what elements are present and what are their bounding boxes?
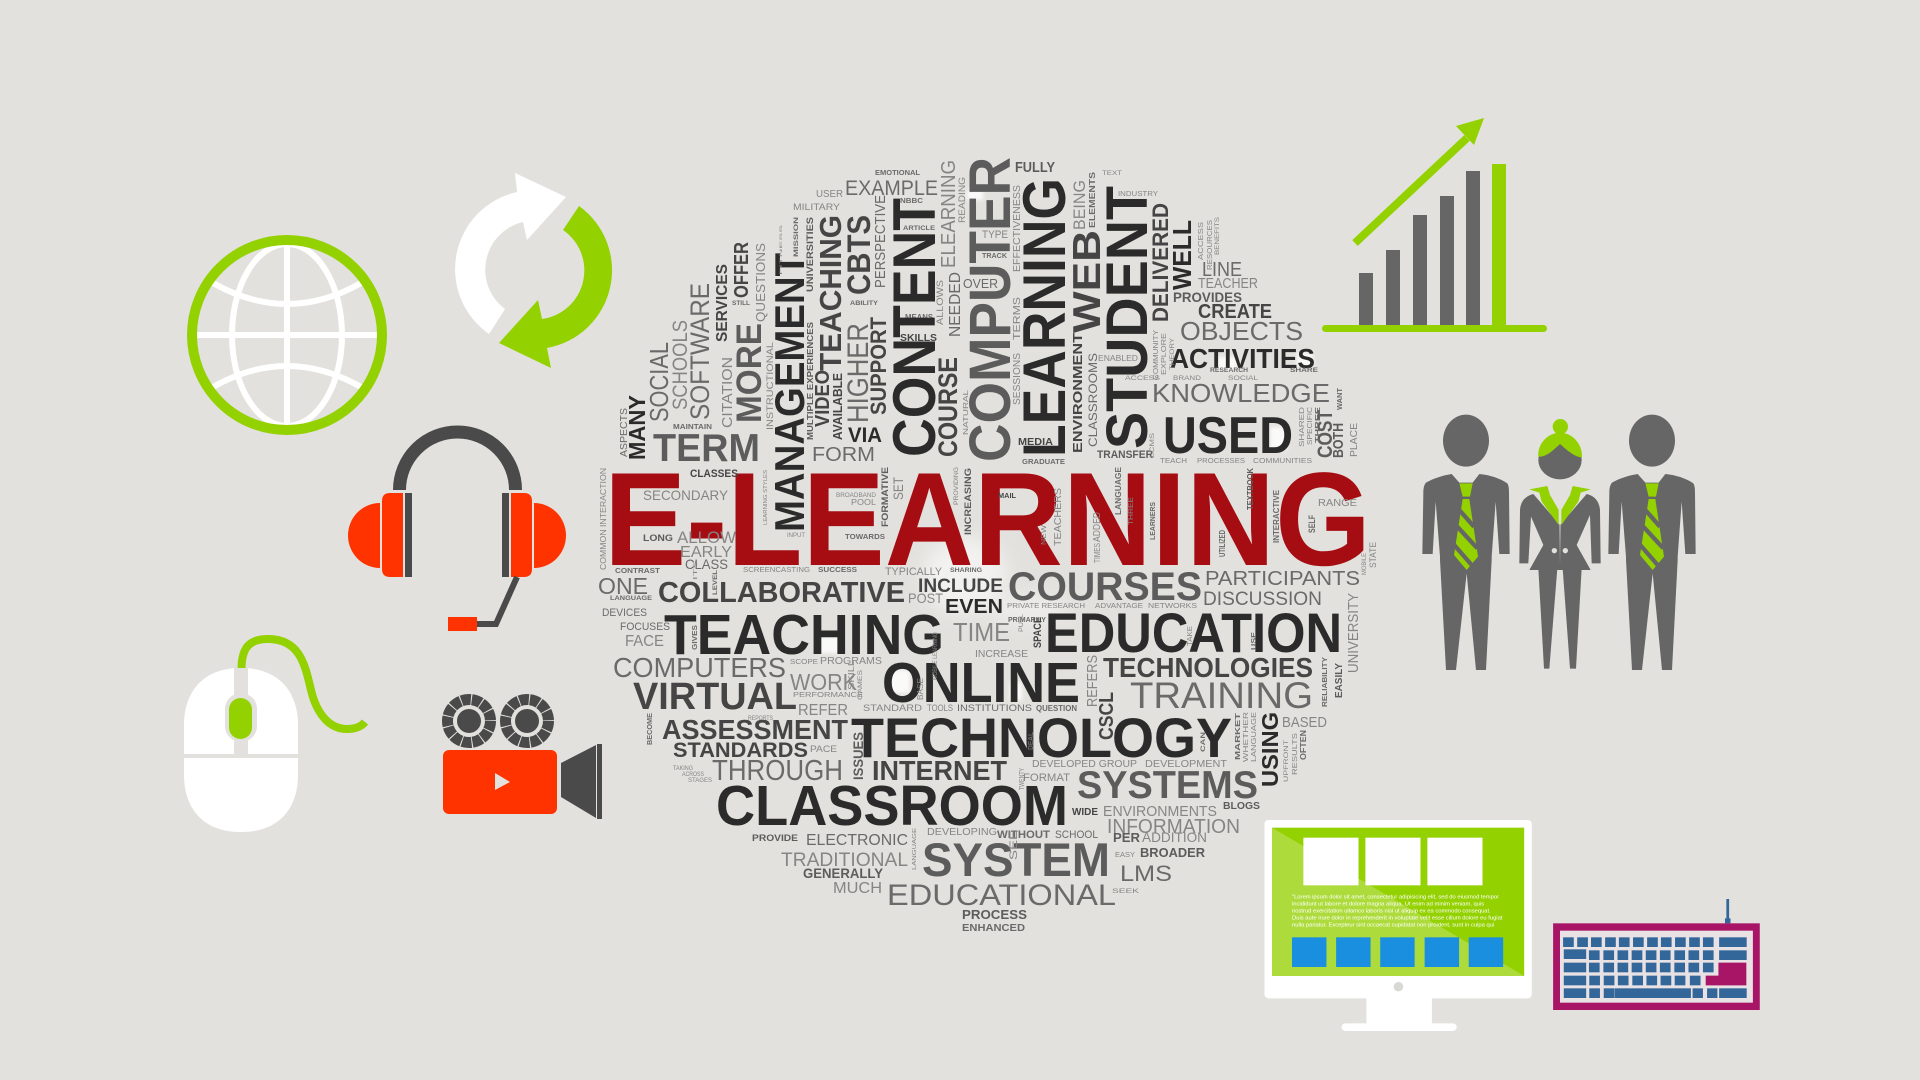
horizontal words: INTERNET	[872, 755, 1007, 786]
horizontal words: ENVIRONMENTS	[1103, 803, 1217, 820]
horizontal words: REFER	[798, 702, 848, 719]
vertical words: ISSUES	[850, 732, 866, 780]
horizontal words: ENABLED	[1098, 354, 1138, 363]
horizontal words: INDUSTRY	[1118, 191, 1158, 198]
vertical words: STUDENT	[1095, 186, 1160, 449]
vertical words: CITATION	[719, 357, 736, 428]
small word clusters: WHETHER	[1243, 712, 1250, 762]
vertical words: LEARNING STYLES	[763, 469, 769, 525]
horizontal words: FACE	[625, 633, 664, 650]
vertical words: NEW	[1041, 525, 1048, 545]
word cloud	[598, 157, 1378, 934]
vertical words: GIVES	[692, 625, 699, 650]
horizontal words: ACTIVITIES	[1170, 343, 1315, 374]
vertical words: TWENTY	[1019, 768, 1026, 790]
small word clusters: BENEFITS	[1215, 217, 1221, 255]
vertical words: SCHOOLS	[669, 320, 692, 410]
vertical words: BEING	[1070, 180, 1089, 230]
horizontal words: SECONDARY	[643, 487, 729, 503]
horizontal words: VIRTUAL	[633, 676, 797, 718]
vertical words: ASPECTS	[619, 408, 630, 457]
vertical words: NEEDED	[947, 272, 964, 337]
horizontal words: DISCUSSION	[1203, 589, 1322, 610]
horizontal words: TIME	[953, 617, 1010, 647]
horizontal words: TRANSFER	[1097, 449, 1153, 461]
horizontal words: TECHNOLOGIES	[1103, 652, 1313, 683]
horizontal words: TOWARDS	[845, 534, 885, 541]
small word clusters: ACCESS	[1198, 222, 1205, 260]
horizontal words: MEANS	[905, 313, 934, 322]
small word clusters: RESOURCES	[1207, 220, 1214, 270]
vertical words: PROVIDING	[954, 467, 960, 505]
vertical words: MANY	[624, 395, 650, 460]
small word clusters: RESULTS	[1292, 733, 1299, 775]
vertical words: MOBILE	[1362, 553, 1368, 575]
horizontal words: TEXT	[1102, 171, 1122, 177]
vertical words: USE	[1251, 632, 1258, 650]
small word clusters: OFTEN	[1299, 730, 1308, 760]
small word clusters: EXPLORE	[1161, 333, 1168, 375]
horizontal words: ONLINE	[882, 651, 1080, 715]
vertical words: TIMES	[1093, 543, 1102, 563]
vertical words: RELIABILITY	[1322, 657, 1329, 707]
horizontal words: COMMUNITIES	[1253, 458, 1312, 465]
vertical words: UNIVERSITIES	[805, 217, 815, 292]
horizontal words: MEDIA	[1018, 437, 1053, 448]
horizontal words: INCLUDE	[918, 576, 1003, 597]
horizontal words: ELECTRONIC	[806, 832, 908, 849]
vertical words: LEARNING	[1011, 178, 1078, 457]
vertical words: ENVIRONMENT	[1070, 333, 1085, 453]
vertical words: ELEARNING	[938, 160, 960, 268]
horizontal words: STILL	[732, 301, 750, 307]
vertical words: SPACE	[1032, 617, 1044, 648]
horizontal words: INFORMATION	[1107, 816, 1240, 838]
vertical words: SERVICES	[714, 264, 731, 342]
horizontal words: SCHOOL	[1055, 829, 1098, 841]
horizontal words: FORM	[812, 444, 875, 466]
vertical words: UTILIZED	[1218, 530, 1227, 557]
vertical words: ADDED	[1092, 512, 1103, 542]
horizontal words: WORK	[790, 669, 858, 695]
horizontal words: CLASS	[685, 556, 728, 572]
small word clusters: MISSION	[794, 217, 800, 257]
vertical words: ELEMENTS	[1088, 171, 1097, 228]
vertical words: REFERS	[1084, 655, 1101, 707]
horizontal words: EASY	[1115, 852, 1135, 859]
icon: desktop monitor	[1264, 820, 1532, 1031]
vertical words: SESSIONS	[1012, 353, 1023, 405]
horizontal words: EVEN	[945, 596, 1003, 618]
horizontal words: PROCESSES	[1197, 458, 1245, 465]
horizontal words: COURSES	[1008, 565, 1202, 609]
man left	[1422, 415, 1510, 670]
horizontal words: EMOTIONAL	[875, 170, 921, 177]
horizontal words: ALLOW	[677, 528, 736, 547]
horizontal words: SKILLS	[900, 333, 937, 344]
vertical words: TEACHING	[813, 215, 848, 371]
man right	[1608, 415, 1696, 670]
small word clusters: UPFRONT	[1284, 740, 1290, 782]
horizontal words: QUESTION	[1036, 704, 1077, 713]
vertical words: COURSE	[933, 357, 963, 457]
title: E-LEARNING: E-LEARNING	[604, 446, 1371, 594]
vertical words: MANAGEMENT	[766, 253, 813, 532]
vertical words: SUPPORT	[866, 316, 891, 415]
horizontal words: LMS	[1120, 861, 1172, 886]
vertical words: COMPUTER	[958, 157, 1023, 462]
horizontal words: SYSTEM	[922, 833, 1110, 886]
horizontal words: SCOPE	[790, 659, 818, 666]
icon: globe	[192, 240, 382, 430]
vertical words: WANT	[1337, 387, 1344, 410]
horizontal words: THROUGH	[712, 755, 843, 787]
horizontal words: BASED	[1282, 714, 1327, 731]
small word clusters: SPECIFIC	[1307, 407, 1314, 445]
horizontal words: ADDITION	[1142, 829, 1207, 845]
vertical words: DEAL	[1028, 731, 1035, 750]
horizontal words: NBBC	[900, 198, 923, 205]
horizontal words: MAIL	[998, 493, 1017, 500]
horizontal words: DEVICES	[602, 607, 647, 619]
horizontal words: WIDE	[1072, 807, 1098, 818]
horizontal words: MAINTAIN	[673, 424, 712, 431]
horizontal words: PER	[1113, 830, 1141, 845]
vertical words: SELF	[1307, 515, 1317, 533]
horizontal words: TECHNOLOGY	[851, 706, 1232, 769]
vertical words: CAN	[1201, 732, 1207, 752]
vertical words: ITS	[693, 558, 699, 580]
horizontal words: ADVANTAGE	[1095, 603, 1143, 610]
vertical words: COST	[1314, 410, 1337, 458]
vertical words: LANGUAGE	[1114, 466, 1123, 515]
vertical words: STATE	[1368, 542, 1378, 568]
horizontal words: SEEK	[1112, 889, 1139, 895]
horizontal words: SOCIAL	[1228, 376, 1259, 382]
icon: headset	[348, 432, 566, 631]
horizontal words: PROGRAMS	[820, 656, 882, 667]
horizontal words: CONTRAST	[615, 568, 661, 575]
horizontal words	[598, 159, 1360, 934]
horizontal words: FORMAT	[1023, 772, 1070, 784]
horizontal words: COMPUTERS	[613, 652, 786, 683]
horizontal words: ACCESS	[1125, 376, 1160, 382]
horizontal words: SHARING	[950, 568, 982, 574]
vertical words: INTERACTIVE	[1272, 489, 1281, 543]
small word clusters	[778, 217, 1322, 782]
horizontal words: NETWORKS	[1148, 603, 1197, 610]
vertical words: OFFER	[731, 242, 753, 298]
horizontal words: LINE	[1202, 259, 1242, 281]
horizontal words: SUCCESS	[818, 567, 857, 574]
vertical words: CONTENT	[881, 198, 948, 457]
small word clusters: MARKET	[1235, 712, 1242, 760]
horizontal words: COLLABORATIVE	[658, 577, 905, 609]
icon: computer mouse	[184, 639, 365, 832]
monitor lorem text: nostrud exercitation ullamco laboris nisi ut aliquip ex ea commodo consequat.	[1292, 908, 1491, 914]
horizontal words: GENERALLY	[803, 865, 884, 881]
horizontal words: MUCH	[833, 880, 882, 897]
horizontal words: PERFORMANCE	[793, 692, 863, 699]
vertical words: CLASSROOMS	[1086, 353, 1100, 447]
horizontal words: PRIMARILY	[1008, 617, 1046, 624]
horizontal words: INSTITUTIONS	[957, 703, 1032, 713]
vertical words: TAKE	[1187, 626, 1194, 646]
horizontal words: LANGUAGE	[610, 596, 652, 602]
horizontal words: MILITARY	[793, 202, 840, 212]
horizontal words: PROVIDES	[1173, 289, 1242, 305]
vertical words: BOTH	[1330, 423, 1347, 458]
horizontal words: ARTICLE	[903, 226, 935, 232]
vertical words: FORMATIVE	[880, 467, 890, 527]
horizontal words: EDUCATION	[1045, 601, 1342, 664]
monitor lorem text: incididunt ut labore et dolore magna aliqua. Ut enim ad minim veniam, quis	[1292, 901, 1485, 907]
small word clusters: LANGUAGE	[1251, 712, 1258, 762]
horizontal words: GRADUATE	[1022, 459, 1065, 466]
horizontal words: ASSESSMENT	[662, 714, 848, 745]
horizontal words: SCREENCASTING	[743, 567, 810, 574]
small word clusters: COMMUNITY	[1153, 330, 1160, 380]
horizontal words: POOL	[851, 498, 877, 507]
horizontal words: RANGE	[1318, 498, 1357, 509]
horizontal words: WITHOUT	[997, 829, 1050, 841]
vertical words: LEARNERS	[1150, 502, 1157, 540]
small word clusters: THEORY	[1170, 338, 1176, 370]
horizontal words: TRADITIONAL	[781, 850, 908, 871]
vertical words: SOCIAL	[644, 342, 674, 422]
horizontal words: BROADBAND	[836, 493, 877, 499]
vertical words: LANGUAGE	[912, 827, 918, 870]
vertical words: MOBILE LEARNING	[933, 632, 939, 680]
vertical words: QUESTIONS	[753, 243, 768, 322]
horizontal words: EARLY	[680, 544, 732, 561]
horizontal words: DEVELOPING	[927, 827, 997, 838]
horizontal words: RESEARCH	[1210, 368, 1248, 374]
horizontal words: PROVIDE	[752, 833, 798, 843]
vertical words: READING	[957, 177, 967, 223]
vertical words: INSTRUCTIONAL	[765, 342, 775, 430]
horizontal words: TEACHING	[664, 603, 944, 667]
vertical words: UNIVERSITY	[1345, 593, 1362, 673]
horizontal words: TAKING	[673, 766, 693, 772]
vertical words: TEXTBOOK	[1246, 468, 1255, 510]
vertical words: VIDEO	[812, 370, 834, 427]
vertical words: ALLOWS	[935, 280, 945, 325]
vertical words: PLACE	[1349, 423, 1360, 457]
horizontal words: EDUCATIONAL	[887, 879, 1116, 912]
horizontal words: FULLY	[1015, 159, 1055, 176]
vertical words: HIGHER	[842, 323, 875, 423]
vertical words	[599, 157, 1378, 870]
horizontal words: PARTICIPANTS	[1205, 568, 1360, 590]
vertical words: GAMES	[858, 670, 864, 700]
small word clusters: SHARED	[1299, 407, 1306, 447]
horizontal words: CLASSES	[690, 468, 738, 480]
horizontal words: TEACH	[1160, 458, 1187, 465]
vertical words: PULL	[1019, 613, 1025, 632]
horizontal words: OVER	[963, 276, 998, 291]
horizontal words: SYSTEMS	[1077, 764, 1258, 807]
vertical words: CSCL	[1096, 692, 1118, 740]
horizontal words: LONG	[643, 533, 673, 543]
horizontal words: OBJECTS	[1180, 316, 1303, 346]
small word clusters: FITNESS	[778, 224, 783, 275]
horizontal words: TRAINING	[1130, 675, 1313, 716]
vertical words: MULTIPLE EXPERIENCES	[806, 321, 815, 440]
vertical words: WELL	[1167, 220, 1197, 290]
horizontal words: FOCUSES	[620, 621, 670, 633]
vertical words: SET	[890, 477, 906, 500]
vertical words: USING	[1257, 712, 1283, 787]
horizontal words: SHARE	[1290, 368, 1318, 374]
horizontal words: INPUT	[787, 533, 805, 539]
icon: refresh arrows	[455, 173, 612, 368]
horizontal words: REPORTS	[748, 716, 773, 722]
horizontal words: USER	[816, 189, 843, 200]
chart icon: rising bars with arrow	[1322, 118, 1547, 332]
horizontal words: CREATE	[1198, 301, 1272, 323]
monitor lorem text: Duis aute irure dolor in reprehenderit in voluptate velit esse cillum dolore eu fugiat	[1292, 915, 1503, 921]
horizontal words: TOOLS	[927, 703, 953, 713]
horizontal words: ACROSS	[682, 772, 704, 778]
vertical words: MORE	[730, 323, 769, 423]
vertical words: EASILY	[1334, 663, 1345, 698]
horizontal words: TEACHER	[1198, 275, 1258, 292]
vertical words: BECOME	[647, 713, 654, 745]
horizontal words: INCREASE	[975, 649, 1028, 660]
horizontal words: ENHANCED	[962, 923, 1025, 934]
vertical words: LCMS	[1150, 433, 1156, 458]
horizontal words: ABILITY	[850, 301, 878, 307]
vertical words: DELIVERED	[1148, 203, 1173, 322]
vertical words: LEVEL	[713, 570, 719, 595]
horizontal words: DEVELOPMENT	[1145, 759, 1227, 770]
monitor lorem text	[1292, 894, 1503, 928]
vertical words: THREE	[1128, 497, 1135, 525]
horizontal words: STAGES	[688, 778, 712, 784]
vertical words: CBTS	[841, 215, 877, 295]
horizontal words: PRIVATE RESEARCH	[1007, 603, 1085, 610]
woman centre	[1519, 419, 1601, 669]
horizontal words: PROCESS	[962, 907, 1027, 922]
vertical words: WEB	[1066, 230, 1109, 333]
vertical words: SEE	[1008, 830, 1020, 860]
vertical words: SKILL	[847, 659, 856, 690]
horizontal words: PACE	[810, 744, 837, 754]
vertical words: PERSPECTIVE	[872, 195, 889, 288]
vertical words: AVAILABLE	[830, 373, 845, 440]
vertical words: TERMS	[1012, 297, 1023, 340]
icon: keyboard	[1553, 899, 1760, 1010]
horizontal words: VIA	[848, 424, 882, 447]
horizontal words: TRACK	[982, 253, 1007, 260]
monitor lorem text: nulla pariatur. Excepteur sint occaecat cupidatat non proident, sunt in culpa qui	[1292, 922, 1494, 928]
vertical words: BASE	[916, 678, 925, 700]
horizontal words: POST	[908, 590, 943, 606]
monitor lorem text: "Lorem ipsum dolor sit amet, consectetur adipisicing elit, sed do eiusmod tempor	[1292, 894, 1499, 900]
small word clusters: THREE	[1315, 407, 1322, 443]
vertical words: COMMON INTERACTION	[599, 468, 608, 570]
icon: business people	[1422, 415, 1696, 670]
icon: video camera	[443, 700, 602, 819]
horizontal words: TYPE	[982, 229, 1008, 241]
vertical words: NATURAL	[963, 390, 970, 435]
vertical words: INCREASING	[963, 468, 973, 535]
horizontal words: STANDARDS	[673, 739, 808, 762]
vertical words: TEACHERS	[1053, 488, 1064, 546]
horizontal words: ONE	[598, 573, 648, 599]
horizontal words: STANDARD	[863, 703, 923, 713]
vertical words: SOFTWARE	[685, 283, 715, 420]
horizontal words: DEVELOPED GROUP	[1032, 759, 1137, 770]
horizontal words: TERM	[653, 427, 760, 470]
horizontal words: EXAMPLE	[845, 177, 938, 200]
horizontal words: KNOWLEDGE	[1152, 378, 1330, 408]
horizontal words: CLASSROOM	[716, 774, 1068, 838]
vertical words: EFFECTIVENESS	[1012, 185, 1023, 272]
horizontal words: BRAND	[1173, 376, 1202, 382]
horizontal words: TYPICALLY	[885, 566, 943, 578]
horizontal words: BROADER	[1140, 845, 1206, 860]
horizontal words: USED	[1163, 407, 1293, 465]
horizontal words: BLOGS	[1223, 801, 1260, 812]
